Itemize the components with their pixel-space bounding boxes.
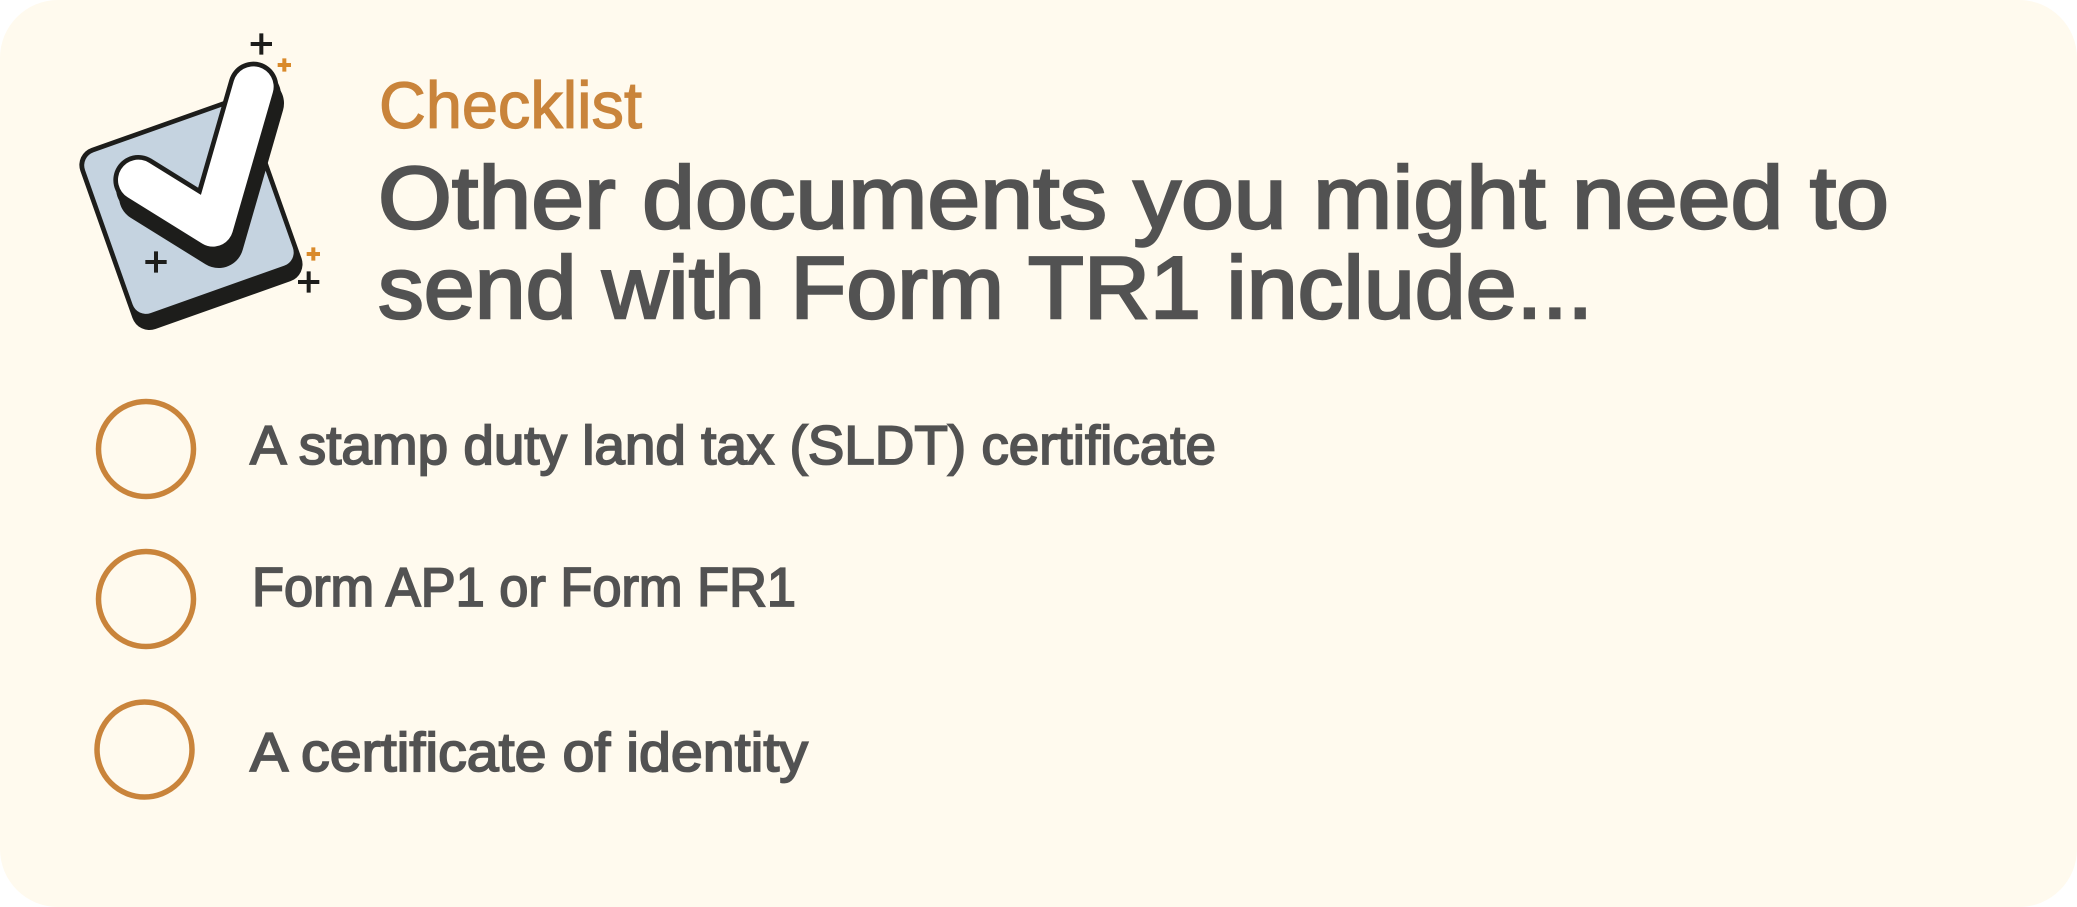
heading: send with Form TR1 include... — [378, 238, 1593, 337]
heading: Other documents you might need to — [378, 148, 1889, 247]
checkbox circle 1 — [98, 402, 194, 496]
checkbox circle 2 — [98, 552, 194, 646]
heading — [378, 148, 1889, 337]
label: Checklist: Checklist — [379, 68, 642, 142]
item text 3: A certificate of identity — [250, 721, 809, 783]
item text 2: Form AP1 or Form FR1 — [252, 556, 796, 618]
icon: tick shadow and outline — [138, 87, 259, 243]
checklist item 1 — [98, 402, 1216, 496]
checkbox circle 3 — [97, 702, 192, 797]
checklist item 2 — [98, 552, 796, 646]
checklist item 3 — [97, 702, 809, 797]
icon: tilted box — [74, 94, 308, 335]
item text 1: A stamp duty land tax (SLDT) certificate — [250, 414, 1216, 476]
icon: tick on a tilted box — [74, 33, 320, 335]
icon: sparkle plus signs — [145, 33, 320, 293]
icon: tick face — [138, 87, 253, 226]
